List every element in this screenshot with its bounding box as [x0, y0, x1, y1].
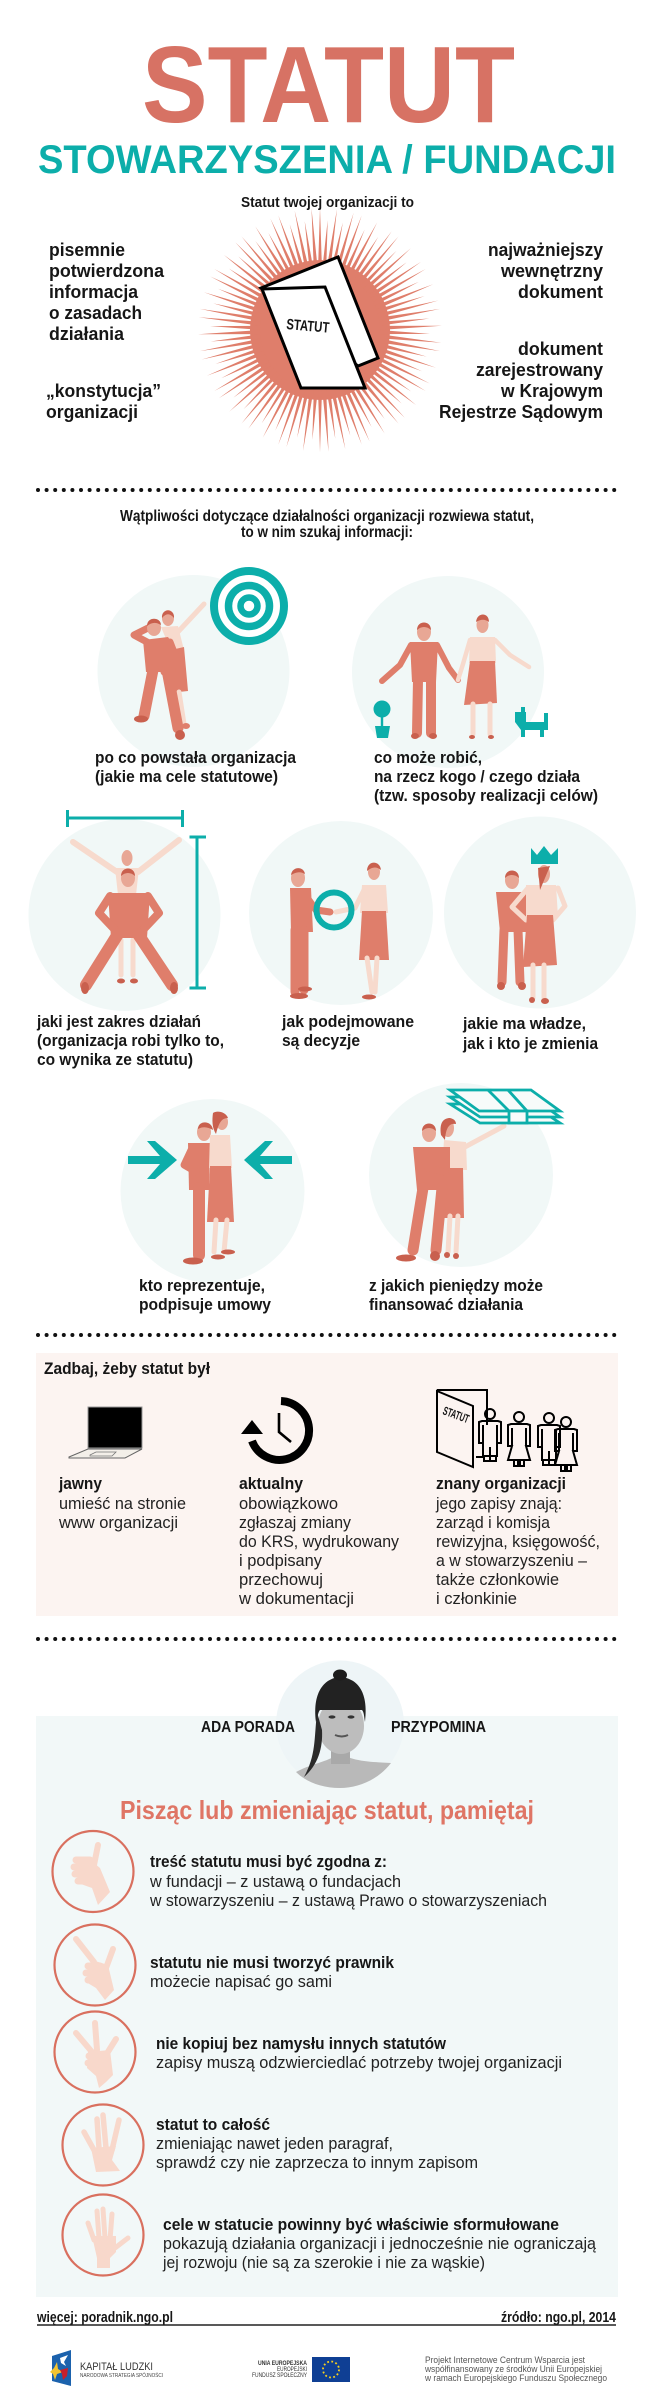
- caption: representation: podpisuje umowy: [139, 1295, 272, 1314]
- text block: left definitions: pisemnie: [49, 240, 125, 260]
- logo: European Union: UNIA EUROPEJSKA: [258, 2361, 308, 2367]
- caption: scope: co wynika ze statutu): [37, 1050, 193, 1069]
- label: reminds: PRZYPOMINA: [391, 1719, 486, 1736]
- caption: finance: [369, 1276, 543, 1314]
- section heading: [120, 508, 534, 541]
- icon: hand one finger: [52, 1831, 134, 1912]
- text block: left definitions: „konstytucja”: [46, 381, 161, 401]
- funding note: Projekt Internetowe Centrum Wsparcia jest: [425, 2355, 585, 2365]
- text block: left definitions: o zasadach: [49, 303, 142, 323]
- text: reminder 3: zapisy muszą odzwierciedlać potrzeby twojej organizacji: [156, 2053, 562, 2072]
- caption: means: co może robić,: [374, 748, 482, 767]
- title: STATUT: [142, 24, 515, 146]
- subtitle: STOWARZYSZENIA / FUNDACJI: [38, 138, 616, 182]
- panel: representation scene: [120, 1099, 304, 1283]
- people: couple with crown: [496, 865, 565, 1004]
- caption: means: na rzecz kogo / czego działa: [374, 767, 580, 786]
- logo: Kapitał Ludzki: NARODOWA STRATEGIA SPÓJNOŚCI: [80, 2371, 163, 2379]
- people: holding money: [396, 1118, 504, 1262]
- panel: goals scene: [98, 571, 290, 767]
- text: reminder 5: [162, 2215, 597, 2272]
- text block: right definitions: w Krajowym: [500, 381, 603, 401]
- text: known: a w stowarzyszeniu –: [436, 1551, 587, 1570]
- text: current: aktualny: [239, 1474, 303, 1493]
- panel: authorities scene: [444, 816, 636, 1008]
- panel: means scene: [352, 576, 548, 768]
- icon: statute and members: [437, 1390, 577, 1471]
- logo: European Union: EUROPEJSKI: [277, 2367, 307, 2373]
- icon: laptop: [69, 1407, 142, 1458]
- caption: authorities: jak i kto je zmienia: [462, 1034, 598, 1053]
- logo: Kapitał Ludzki: [50, 2350, 163, 2386]
- text block: left definitions: informacja: [49, 282, 139, 302]
- caption: goals: (jakie ma cele statutowe): [95, 767, 278, 786]
- funding note: współfinansowany ze środków Unii Europejskiej: [424, 2364, 602, 2374]
- text: public: umieść na stronie: [59, 1494, 186, 1513]
- text: reminder 2: [150, 1953, 394, 1991]
- text block: right definitions: najważniejszy: [488, 240, 603, 260]
- people: back to back: [183, 1112, 235, 1264]
- text block: right definitions: Rejestrze Sądowym: [439, 402, 603, 422]
- text: known: rewizyjna, księgowość,: [436, 1532, 600, 1551]
- text block: left definitions: działania: [49, 324, 125, 344]
- caption: decisions: jak podejmowane: [281, 1012, 414, 1031]
- people: handshake: [290, 863, 389, 1000]
- logo: European Union: [252, 2357, 350, 2382]
- caption: means: (tzw. sposoby realizacji celów): [374, 786, 598, 805]
- caption: representation: kto reprezentuje,: [139, 1276, 265, 1295]
- text: reminder 5: jej rozwoju (nie są za szerokie i nie za wąskie): [162, 2253, 485, 2272]
- icon: hand three fingers: [54, 2012, 136, 2092]
- text: current: obowiązkowo: [239, 1494, 338, 1513]
- icon: hand four fingers: [62, 2104, 144, 2186]
- caption: finance: finansować działania: [369, 1295, 523, 1314]
- text: reminder 4: sprawdź czy nie zaprzecza to innym zapisom: [156, 2153, 478, 2172]
- text: reminder 2: możecie napisać go sami: [150, 1972, 332, 1991]
- panel: finance scene: [369, 1083, 560, 1267]
- text: reminder 4: [156, 2115, 478, 2172]
- text: known: i członkinie: [436, 1589, 517, 1608]
- caption: scope: jaki jest zakres działań: [36, 1012, 201, 1031]
- text block: left definitions: potwierdzona: [49, 261, 165, 281]
- text: current: w dokumentacji: [238, 1589, 354, 1608]
- text: reminder 2: statutu nie musi tworzyć prawnik: [150, 1953, 394, 1972]
- text: public: [58, 1474, 186, 1532]
- icon: hand two fingers: [54, 1924, 136, 2006]
- text: reminder 4: zmieniając nawet jeden paragraf,: [156, 2134, 393, 2153]
- label: name: ADA PORADA: [201, 1719, 295, 1736]
- section heading: to w nim szukaj informacji:: [241, 524, 413, 541]
- panel: care checklist: [36, 1353, 618, 1616]
- logo: Kapitał Ludzki: KAPITAŁ LUDZKI: [80, 2361, 153, 2373]
- caption: goals: [95, 748, 296, 786]
- logo: European Union: FUNDUSZ SPOŁECZNY: [252, 2373, 307, 2379]
- text block: right definitions: dokument: [518, 282, 603, 302]
- text block: right definitions: [439, 240, 603, 422]
- icon: open hand: [62, 2194, 144, 2276]
- text block: left definitions: [46, 240, 165, 422]
- text block: right definitions: wewnętrzny: [500, 261, 603, 281]
- footer: more link: więcej: poradnik.ngo.pl: [36, 2310, 173, 2326]
- text: public: jawny: [58, 1474, 102, 1493]
- text: current: [238, 1474, 399, 1608]
- icon: target: [214, 571, 284, 641]
- funding note: [424, 2355, 607, 2383]
- arrow: pointing right: [128, 1141, 177, 1179]
- text: known: [435, 1474, 600, 1608]
- icon: sunburst with document: STATUT: [286, 316, 330, 337]
- caption: finance: z jakich pieniędzy może: [369, 1276, 543, 1295]
- icon: width bracket: [68, 810, 182, 827]
- icon: sunburst with document: [151, 193, 446, 500]
- icon: clock with arrow: [241, 1401, 309, 1460]
- panel: scope scene: [28, 810, 220, 1011]
- intro label: Statut twojej organizacji to: [241, 195, 414, 211]
- text: reminder 5: pokazują działania organizacji i jednocześnie nie ograniczają: [163, 2234, 597, 2253]
- icon: dog: [515, 707, 548, 737]
- section heading: Wątpliwości dotyczące działalności organizacji rozwiewa statut,: [120, 508, 534, 525]
- text: reminder 3: [156, 2034, 562, 2072]
- text: public: www organizacji: [58, 1513, 178, 1532]
- text: known: także członkowie: [436, 1570, 559, 1589]
- text: reminder 1: [149, 1852, 547, 1910]
- icon: crown: [531, 846, 558, 864]
- caption: goals: po co powstała organizacja: [95, 748, 296, 767]
- text: current: do KRS, wydrukowany: [239, 1532, 399, 1551]
- text: known: zarząd i komisja: [436, 1513, 551, 1532]
- people: spread limbs: [73, 840, 179, 994]
- icon: money stack: [450, 1090, 560, 1123]
- people: holding hands: [382, 614, 529, 739]
- caption: scope: (organizacja robi tylko to,: [37, 1031, 224, 1050]
- caption: representation: [139, 1276, 272, 1314]
- caption: decisions: są decyzje: [282, 1031, 360, 1050]
- caption: authorities: [462, 1014, 598, 1053]
- text: reminder 5: cele w statucie powinny być właściwie sformułowane: [163, 2215, 559, 2234]
- caption: scope: [36, 1012, 224, 1069]
- caption: means: [374, 748, 598, 805]
- portrait: Ada Porada: [276, 1660, 404, 1788]
- text: reminder 4: statut to całość: [156, 2115, 270, 2134]
- panel: decisions scene: [249, 821, 433, 1005]
- funding note: w ramach Europejskiego Funduszu Społecznego: [424, 2373, 607, 2383]
- arrow: pointing left: [244, 1141, 292, 1179]
- reminders heading: Pisząc lub zmieniając statut, pamiętaj: [120, 1795, 534, 1825]
- text block: left definitions: organizacji: [46, 402, 138, 422]
- text: reminder 3: nie kopiuj bez namysłu innych statutów: [156, 2034, 447, 2053]
- icon: statute and members: STATUT: [441, 1404, 472, 1426]
- text: reminder 1: treść statutu musi być zgodna z:: [150, 1852, 387, 1871]
- icon: ring: [316, 892, 352, 928]
- panel heading: Zadbaj, żeby statut był: [44, 1359, 210, 1378]
- text: reminder 1: w stowarzyszeniu – z ustawą Prawo o stowarzyszeniach: [149, 1891, 547, 1910]
- text: current: zgłaszaj zmiany: [239, 1513, 351, 1532]
- text: reminder 1: w fundacji – z ustawą o fundacjach: [149, 1872, 401, 1891]
- icon: potted tree: [374, 700, 390, 738]
- text: current: i podpisany: [239, 1551, 322, 1570]
- footer: source: źródło: ngo.pl, 2014: [501, 2310, 616, 2326]
- panel: reminders: [36, 1716, 618, 2297]
- icon: height bracket: [190, 837, 206, 988]
- caption: decisions: [281, 1012, 414, 1050]
- text block: right definitions: zarejestrowany: [476, 360, 603, 380]
- text: known: jego zapisy znają:: [435, 1494, 562, 1513]
- text: current: przechowuj: [239, 1570, 323, 1589]
- text block: right definitions: dokument: [518, 339, 603, 359]
- text: known: znany organizacji: [436, 1474, 566, 1493]
- caption: authorities: jakie ma władze,: [462, 1014, 586, 1033]
- people: pointing at target: [134, 604, 204, 740]
